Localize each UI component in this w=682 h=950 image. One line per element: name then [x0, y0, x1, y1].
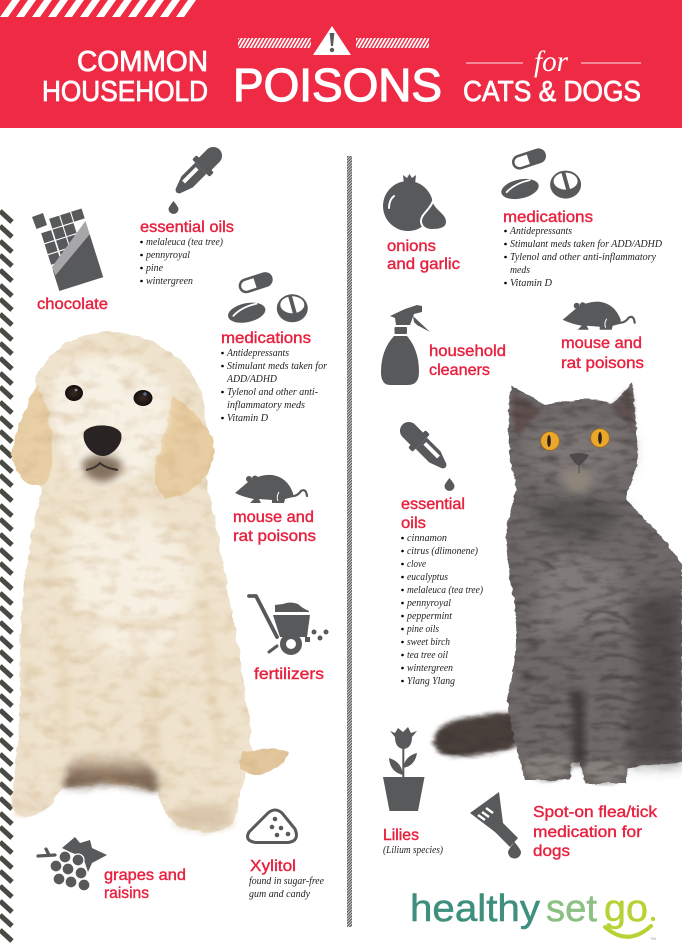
- item: fertilizers: [249, 596, 328, 683]
- list: medications right: Antidepressants: [509, 226, 572, 237]
- list: essential oils right: peppermint: [406, 611, 453, 622]
- label: mouse and rat poisons: [561, 335, 644, 372]
- item: mouse and rat poisons right: [561, 302, 644, 372]
- list: essential oils right: citrus (dlimonene): [407, 546, 478, 557]
- title: common household: COMMON: [77, 46, 208, 78]
- icon: dropper: [168, 141, 228, 214]
- list: essential oils right: Ylang Ylang: [407, 676, 455, 687]
- list: medications left: Stimulant meds taken for: [227, 361, 328, 372]
- label: medications: medications: [503, 209, 593, 226]
- label: essential oils: [401, 496, 465, 532]
- list: essential oils right: clove: [407, 559, 426, 570]
- list: essential oils right: tea tree oil: [407, 650, 448, 661]
- icon: mouse: [235, 475, 307, 503]
- icon: spot-on applicator: [470, 792, 521, 859]
- label: spot-on flea and tick medication for dogs: dogs: [533, 843, 570, 860]
- list: medications right: meds: [510, 265, 530, 276]
- dog tail: [240, 749, 290, 774]
- icon: grapes: [38, 837, 107, 891]
- list: medications left: inflammatory meds: [227, 400, 305, 411]
- title: common household: [42, 46, 208, 108]
- label: xylitol: Xylitol: [250, 858, 296, 875]
- list: essential oils right: sweet birch: [407, 637, 450, 648]
- list: medications right: Stimulant meds taken for ADD/ADHD: [510, 239, 662, 250]
- cat nose and muzzle: [562, 453, 592, 493]
- list: medications left: Tylenol and other anti-: [227, 387, 318, 398]
- item: xylitol: [248, 810, 324, 900]
- icon: pills: [499, 146, 581, 202]
- header banner: [0, 0, 682, 128]
- left chevron border: [0, 211, 12, 941]
- title: for cats and dogs: [463, 45, 641, 108]
- item: spot-on flea and tick medication: [470, 792, 658, 860]
- list: medications right: [504, 226, 662, 289]
- item: grapes and raisins: [38, 837, 186, 902]
- dog belly shadow: [64, 750, 158, 792]
- photo: british shorthair cat: [434, 382, 682, 783]
- item: mouse and rat poisons left: [233, 475, 316, 545]
- label: spot-on flea and tick medication for dogs: medication for: [533, 824, 643, 841]
- label: mouse and rat poisons: mouse and: [561, 335, 642, 352]
- title: poisons: POISONS: [233, 59, 442, 111]
- label: lilies: Lilies: [383, 827, 419, 844]
- list: essential oils right: melaleuca (tea tree): [407, 585, 483, 596]
- icon: spray bottle: [381, 305, 430, 385]
- label: household cleaners: cleaners: [429, 362, 490, 379]
- title: for cats and dogs: CATS & DOGS: [463, 76, 641, 108]
- list: essential oils right: wintergreen: [407, 663, 453, 674]
- logo: healthy set go: [410, 888, 656, 941]
- dog nose and muzzle: [82, 425, 122, 482]
- logo: healthy set go: set: [546, 888, 597, 930]
- label: grapes and raisins: [104, 867, 186, 902]
- label: mouse and rat poisons: rat poisons: [561, 355, 644, 372]
- label: essential oils: essential: [401, 496, 465, 513]
- label: medications: medications: [221, 330, 311, 347]
- title: common household: HOUSEHOLD: [42, 76, 208, 108]
- label: household cleaners: [429, 343, 506, 379]
- cat fur body: [434, 382, 682, 783]
- logo: healthy set go: TM: [650, 936, 656, 941]
- note: xylitol: found in sugar-free: [249, 876, 324, 887]
- list: essential oils right: eucalyptus: [407, 572, 448, 583]
- item: onions and garlic: [383, 174, 460, 273]
- label: spot-on flea and tick medication for dogs: [533, 804, 658, 860]
- list: medications right: Vitamin D: [510, 278, 552, 289]
- label: grapes and raisins: raisins: [104, 885, 149, 902]
- note: lilium species: (Lilium species): [383, 845, 443, 856]
- icon: pills: [226, 270, 308, 326]
- list: medications left: ADD/ADHD: [226, 374, 277, 385]
- item: chocolate: [32, 208, 108, 313]
- list: medications left: Vitamin D: [227, 413, 268, 424]
- label: mouse and rat poisons: [233, 509, 316, 545]
- list: essential oils left: wintergreen: [146, 276, 193, 287]
- label: mouse and rat poisons: mouse and: [233, 509, 314, 526]
- cat paws: [524, 754, 626, 783]
- list: essential oils left: melaleuca (tea tree): [146, 237, 223, 248]
- list: essential oils right: [401, 533, 483, 687]
- label: chocolate: chocolate: [37, 296, 108, 313]
- list: essential oils left: pennyroyal: [145, 250, 190, 261]
- logo: healthy set go: healthy: [410, 888, 540, 930]
- list: medications left: Antidepressants: [226, 348, 289, 359]
- icon: dropper: [394, 416, 454, 491]
- title: for cats and dogs: for: [534, 45, 568, 78]
- icon: chocolate bar: [32, 208, 103, 291]
- item: lilies: [383, 727, 443, 856]
- label: spot-on flea and tick medication for dogs: Spot-on flea/tick: [533, 804, 658, 821]
- item: medications left: [221, 270, 328, 424]
- label: onions and garlic: [387, 238, 460, 273]
- dog ears: [12, 385, 52, 485]
- list: essential oils right: pine oils: [406, 624, 439, 635]
- icon: warning triangle: [313, 26, 351, 55]
- dog paws: [172, 804, 233, 830]
- list: essential oils right: pennyroyal: [406, 598, 451, 609]
- list: essential oils left: pine: [145, 263, 163, 274]
- label: mouse and rat poisons: rat poisons: [233, 528, 316, 545]
- label: grapes and raisins: grapes and: [104, 867, 186, 884]
- list: essential oils right: cinnamon: [407, 533, 447, 544]
- item: essential oils right: [394, 416, 483, 687]
- label: fertilizers: fertilizers: [254, 666, 324, 683]
- note: xylitol: gum and candy: [249, 889, 310, 900]
- item: household cleaners: [381, 305, 506, 385]
- icon: xylitol pile: [248, 810, 296, 842]
- cat eyes: [540, 428, 610, 451]
- icon: onion and garlic: [383, 174, 447, 231]
- icon: fertilizer spreader: [249, 596, 328, 652]
- label: essential oils: oils: [401, 515, 426, 532]
- label: onions and garlic: onions: [387, 238, 436, 255]
- center divider: [347, 156, 352, 927]
- item: essential oils left: [140, 141, 234, 287]
- icon: mouse: [563, 302, 635, 330]
- list: medications left: [221, 348, 328, 424]
- label: essential oils: essential oils: [140, 219, 234, 236]
- note: xylitol: [249, 876, 324, 900]
- list: essential oils left: [140, 237, 223, 287]
- icon: potted lily: [383, 727, 424, 811]
- photo: golden retriever puppy: [11, 332, 290, 832]
- item: medications right: [499, 146, 662, 289]
- label: household cleaners: household: [429, 343, 506, 360]
- logo: healthy set go: go: [604, 888, 648, 930]
- list: medications right: Tylenol and other anti-inflammatory: [510, 252, 656, 263]
- dog eyes: [65, 385, 152, 406]
- label: onions and garlic: and garlic: [387, 256, 460, 273]
- dog fur body: [11, 332, 290, 832]
